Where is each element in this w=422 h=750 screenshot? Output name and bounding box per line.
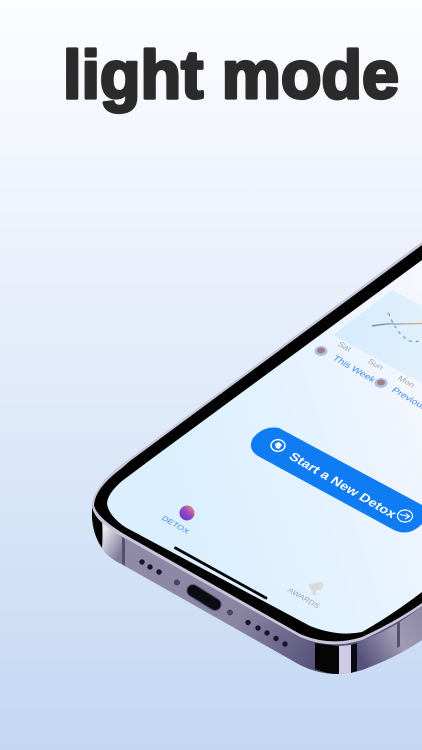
phone	[92, 242, 422, 674]
left black antenna side	[92, 505, 105, 548]
speaker holes left	[139, 559, 162, 575]
legend: This Week: This Week	[331, 354, 378, 384]
button label: Start a New Detox	[286, 450, 400, 521]
button shape	[251, 427, 422, 533]
screw right	[228, 610, 232, 615]
icon: hand badge	[271, 440, 285, 451]
tab: awards	[286, 582, 323, 610]
left light band	[102, 520, 123, 564]
icon: trophy	[309, 582, 323, 595]
phone metal body	[92, 242, 422, 674]
label: DETOX: DETOX	[160, 514, 192, 536]
label: Sat: Sat	[336, 340, 354, 353]
rim highlight	[92, 242, 422, 644]
home indicator	[176, 548, 266, 598]
icon: arrow circle	[398, 510, 412, 522]
button: start a new detox	[251, 427, 422, 533]
white card corner	[411, 268, 422, 292]
right seam	[397, 621, 400, 648]
orange point	[387, 312, 390, 315]
chart	[314, 268, 422, 412]
legend dot: previous	[374, 378, 388, 388]
label: Sun: Sun	[366, 357, 386, 372]
screw left	[174, 580, 180, 585]
left seam	[122, 537, 125, 566]
bottom black band	[315, 643, 339, 674]
right metal section	[339, 606, 422, 674]
tab: detox	[160, 506, 194, 536]
speaker holes right	[245, 620, 288, 647]
chart grid lines	[333, 335, 422, 383]
title: light mode	[63, 37, 399, 113]
black bezel	[94, 245, 422, 641]
label: AWARDS: AWARDS	[286, 586, 322, 610]
previous dashed line	[388, 313, 422, 342]
legend dot: this week	[314, 346, 328, 356]
this week line	[372, 324, 422, 326]
bottom black seam	[351, 643, 357, 673]
charging port	[185, 582, 223, 613]
bottom light band	[339, 645, 351, 674]
icon: detox ball	[180, 506, 194, 520]
chart panel	[333, 290, 422, 383]
screen	[107, 260, 422, 634]
label: Mon: Mon	[396, 374, 418, 389]
